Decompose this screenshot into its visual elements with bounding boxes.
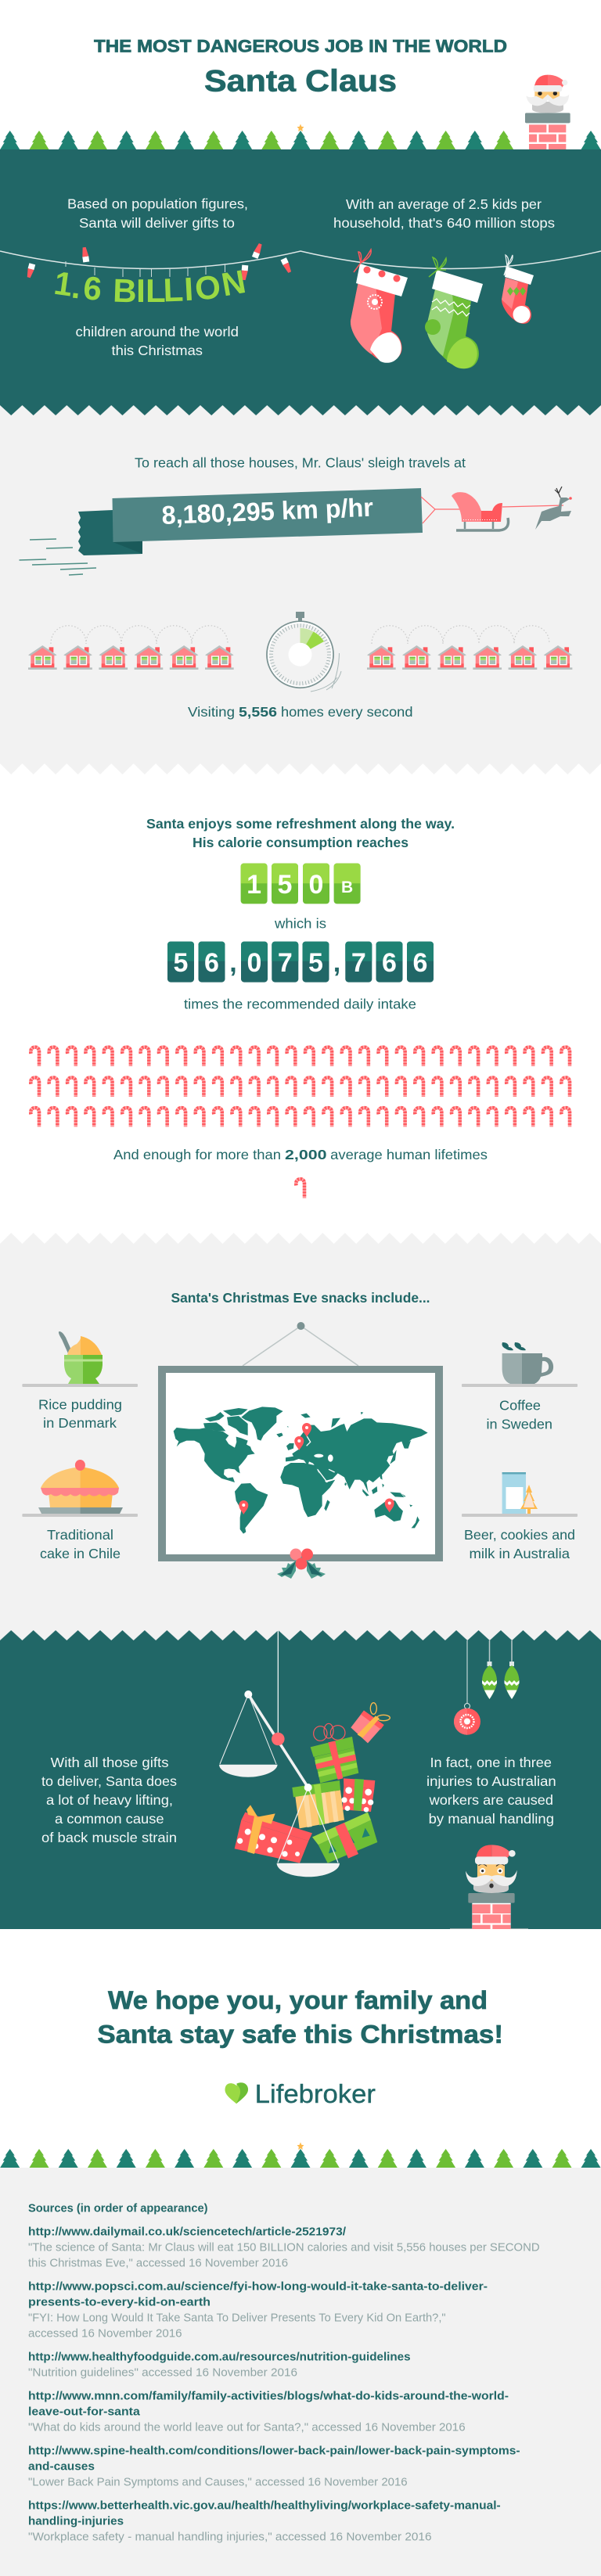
panel: calories (0, 774, 601, 1233)
source 3 (28, 2351, 411, 2380)
text: manual handling: injuries to Australian (426, 1773, 556, 1789)
text: human lifetimes: 2,000 (285, 1147, 327, 1162)
gift pile (235, 1703, 390, 1863)
text: manual handling (426, 1755, 556, 1827)
icons: houses left (28, 626, 234, 670)
number: 1.6 billion: 1 (52, 264, 75, 304)
zigzag teeth (0, 1233, 601, 1244)
text: traditional cake: cake in Chile (40, 1546, 121, 1561)
source 5 (28, 2445, 520, 2489)
left pan (219, 1765, 278, 1777)
text: manual handling: In fact, one in three (430, 1755, 552, 1770)
icon: surprised santa in chimney (450, 1845, 528, 1929)
text: beer cookies milk (464, 1527, 575, 1561)
text: heavy lifting: With all those gifts (51, 1755, 169, 1770)
string of lights (0, 243, 601, 280)
panel: gifts and stops (0, 149, 601, 405)
number: 1.6 billion: N (218, 263, 249, 303)
heading: refreshment (146, 816, 455, 850)
text: children around the world: children around the world (75, 324, 239, 340)
heading: snacks: Santa's Christmas Eve snacks include... (171, 1290, 430, 1306)
text: rice pudding: Rice pudding (38, 1397, 122, 1413)
source 2: accessed 16 November 2016 (28, 2328, 182, 2341)
number: 1.6 billion: . (70, 268, 83, 306)
text: rice pudding (38, 1397, 122, 1431)
counter: 150 billion: 5 (278, 870, 292, 900)
icon: santa in chimney (525, 75, 570, 149)
icon: milk and cookie (462, 1472, 578, 1517)
star gift (235, 1805, 312, 1863)
source 4: http://www.mnn.com/family/family-activities/blogs/what-do-kids-around-the-world- (28, 2391, 509, 2403)
text: sleigh travels: To reach all those houses, Mr. Claus' sleigh travels at (135, 455, 466, 471)
source 2: "FYI: How Long Would It Take Santa To Deliver Presents To Every Kid On Earth?," (28, 2312, 446, 2325)
map pins (239, 1423, 394, 1514)
text: beer cookies milk: milk in Australia (470, 1546, 570, 1561)
zigzag teeth (0, 1630, 601, 1640)
icon: rice pudding (22, 1332, 138, 1387)
text: heavy lifting: of back muscle strain (41, 1830, 177, 1845)
panel: heavy lifting (0, 1630, 601, 1929)
speed lines (19, 539, 96, 575)
zigzag teeth (0, 763, 601, 774)
scale beam (220, 1630, 338, 1863)
icon: cake (22, 1460, 138, 1517)
counter: 150 billion: B (341, 878, 353, 896)
source 2: http://www.popsci.com.au/science/fyi-how-long-would-it-take-santa-to-deliver- (28, 2281, 488, 2294)
source 6 (28, 2500, 501, 2544)
source 1: http://www.dailymail.co.uk/sciencetech/article-2521973/ (28, 2226, 346, 2239)
icon: coffee (462, 1342, 578, 1387)
text: which is: which is (274, 915, 326, 931)
number: 1.6 billion: 6 (82, 269, 103, 307)
map: continents (174, 1407, 428, 1534)
source 4: leave-out-for-santa (28, 2406, 141, 2419)
text: heavy lifting: a common cause (55, 1811, 164, 1827)
counter: 56,075,766: 7 (278, 948, 293, 978)
text: traditional cake (40, 1527, 121, 1561)
counter: 56,075,766 (167, 942, 434, 983)
icon: green stocking (425, 257, 483, 368)
counter: 56,075,766: 6 (204, 948, 219, 978)
icon: sleigh and reindeer (421, 487, 572, 530)
counter: 56,075,766: 5 (308, 948, 323, 978)
text: children around the world (75, 324, 239, 358)
panel: christmas eve snacks (0, 1233, 601, 1630)
divider zigzag: grey to white (0, 763, 601, 774)
logo: lifebroker: Lifebroker (255, 2079, 376, 2108)
icon: scale with gifts (219, 1630, 390, 1877)
text: homes every second: 5,556 (239, 704, 277, 720)
counter: 56,075,766: 0 (247, 948, 261, 978)
text: human lifetimes (113, 1147, 488, 1162)
icon: stopwatch (267, 612, 341, 692)
heading: stay safe (97, 1986, 503, 2049)
counter: 56,075,766: , (333, 948, 340, 978)
text: homes every second: Visiting (188, 704, 235, 720)
number: 1.6 billion: L (146, 272, 166, 309)
text: population figures: Santa will deliver gifts to (79, 215, 235, 231)
number: 1.6 billion: I (183, 271, 194, 307)
number: 1.6 billion: O (193, 268, 222, 307)
title line: THE MOST DANGEROUS JOB IN THE WORLD (94, 37, 507, 56)
top green gift (311, 1723, 358, 1783)
source 2 (28, 2281, 488, 2341)
text: rice pudding: in Denmark (43, 1415, 117, 1431)
counter: 56,075,766: 6 (413, 948, 427, 978)
tree gift (312, 1813, 377, 1863)
icon: red ornament (454, 1640, 480, 1735)
text: children around the world: this Christmas (111, 343, 203, 358)
polka gift (341, 1778, 375, 1813)
tree row bottom (0, 2142, 600, 2168)
number: 1.6 billion: B (113, 271, 137, 310)
text: heavy lifting: a lot of heavy lifting, (46, 1792, 173, 1808)
source 4 (28, 2391, 509, 2434)
banner: speed (78, 488, 423, 555)
text: coffee: in Sweden (487, 1417, 552, 1432)
text: manual handling: workers are caused (429, 1792, 553, 1808)
source 6: handling-injuries (28, 2516, 124, 2528)
source 6: https://www.betterhealth.vic.gov.au/health/healthyliving/workplace-safety-manual- (28, 2500, 501, 2513)
panel: sources (0, 2168, 601, 2576)
source 3: "Nutrition guidelines" accessed 16 November 2016 (28, 2367, 297, 2380)
source 5: http://www.spine-health.com/conditions/lower-back-pain/lower-back-pain-symptoms- (28, 2445, 520, 2458)
counter: 56,075,766: 6 (382, 948, 397, 978)
source 1 (28, 2226, 540, 2270)
text: human lifetimes: And enough for more than (113, 1147, 281, 1162)
text: stops per household (333, 196, 555, 231)
text: beer cookies milk: Beer, cookies and (464, 1527, 575, 1543)
source 3: http://www.healthyfoodguide.com.au/resources/nutrition-guidelines (28, 2351, 411, 2364)
heading: stay safe: We hope you, your family and (108, 1986, 488, 2014)
counter: 150 billion: 1 (247, 870, 261, 900)
icons: houses right (367, 626, 572, 670)
heading: sources: Sources (in order of appearance) (28, 2202, 208, 2215)
text: population figures (67, 196, 248, 231)
text: population figures: Based on population figures, (67, 196, 248, 212)
panel: hero title (0, 0, 601, 149)
text: homes every second (188, 704, 413, 720)
counter: 150 billion: 0 (309, 870, 323, 900)
text: traditional cake: Traditional (47, 1527, 113, 1543)
text: stops per household: With an average of 2.5 kids per (346, 196, 542, 212)
text: stops per household: household, that's 640 million stops (333, 215, 555, 231)
right pan (277, 1863, 340, 1877)
heading: refreshment: His calorie consumption reaches (193, 835, 408, 850)
source 6: "Workplace safety - manual handling injuries," accessed 16 November 2016 (28, 2531, 432, 2544)
main title: Santa Claus (204, 64, 397, 99)
text: manual handling: by manual handling (429, 1811, 554, 1827)
panel: sleigh speed and homes (19, 455, 572, 720)
icon: small stocking (502, 255, 534, 324)
text: heavy lifting (41, 1755, 177, 1845)
icons: candy cane rows (31, 1047, 570, 1126)
text: homes every second: homes every second (281, 704, 413, 720)
source 2: presents-to-every-kid-on-earth (28, 2297, 211, 2309)
striped gift (292, 1780, 344, 1828)
small flying gift (351, 1703, 390, 1743)
icon: red stocking (351, 250, 408, 363)
icon: single candy cane (296, 1179, 304, 1198)
banner: speed: 8,180,295 km p/hr (161, 493, 374, 530)
text: coffee: Coffee (499, 1398, 541, 1414)
counter: 56,075,766: 5 (174, 948, 188, 978)
counter: 150 billion (241, 864, 361, 904)
icon: green ornaments (482, 1640, 520, 1699)
icon: holly (277, 1549, 326, 1579)
source 1: this Christmas Eve," accessed 16 November 2016 (28, 2258, 288, 2270)
tree row top (0, 124, 600, 149)
number: 1.6 billion (52, 263, 249, 310)
text: recommended daily intake: times the recommended daily intake (184, 996, 416, 1011)
source 5: and-causes (28, 2461, 95, 2474)
heading: refreshment: Santa enjoys some refreshment along the way. (146, 816, 455, 832)
heading: stay safe: Santa stay safe this Christmas! (97, 2021, 503, 2049)
panel: closing message (0, 1929, 601, 2168)
source 1: "The science of Santa: Mr Claus will eat 150 BILLION calories and visit 5,556 houses per SECOND (28, 2242, 540, 2254)
number: 1.6 billion: L (163, 271, 184, 308)
source 5: "Lower Back Pain Symptoms and Causes," accessed 16 November 2016 (28, 2477, 408, 2489)
source 4: "What do kids around the world leave out for Santa?," accessed 16 November 2016 (28, 2422, 466, 2434)
number: 1.6 billion: I (136, 272, 146, 309)
counter: 56,075,766: , (229, 948, 237, 978)
counter: 56,075,766: 7 (351, 948, 366, 978)
text: heavy lifting: to deliver, Santa does (41, 1773, 177, 1789)
text: coffee (487, 1398, 552, 1432)
framed world map (158, 1322, 443, 1579)
text: human lifetimes: average human lifetimes (330, 1147, 488, 1162)
divider zigzag: teal to grey (0, 405, 601, 763)
